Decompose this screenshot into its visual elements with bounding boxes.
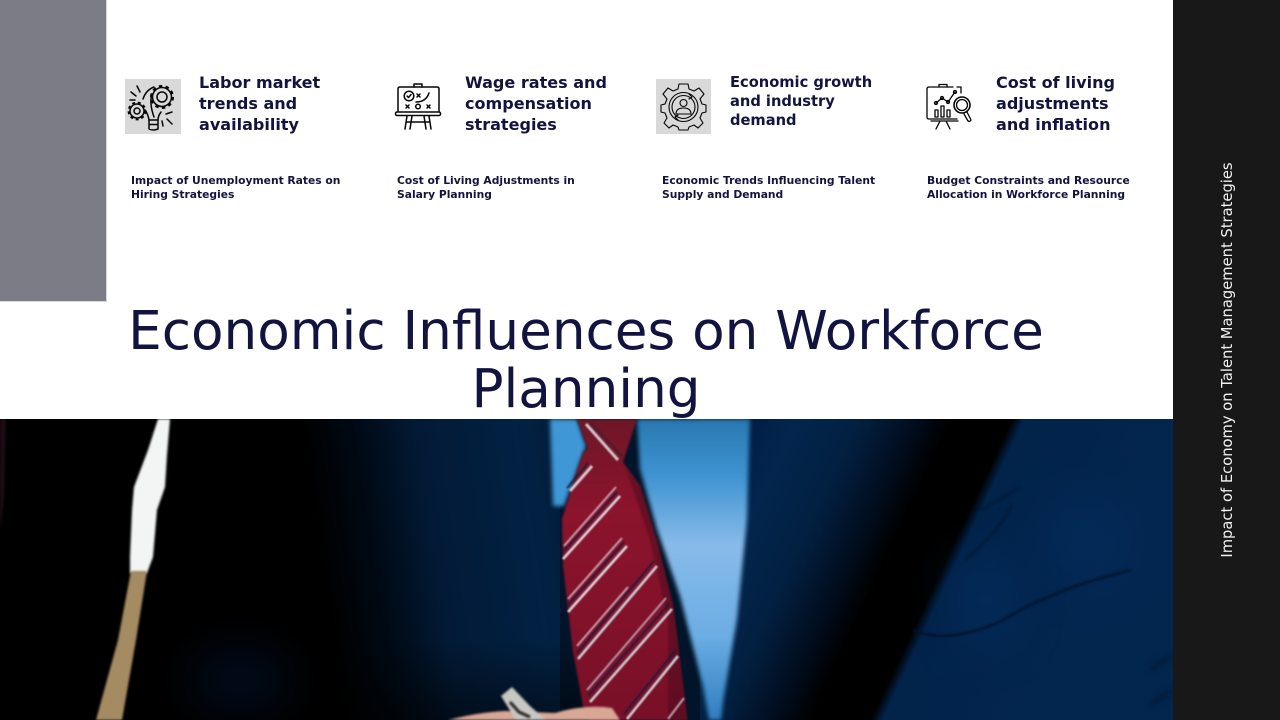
title: Planning	[471, 358, 701, 420]
tan strip	[96, 571, 147, 720]
heading	[465, 73, 607, 134]
suit left side	[0, 419, 562, 720]
icon: presentation chart with magnifier	[926, 84, 972, 130]
description	[927, 174, 1130, 201]
panel: wage rates	[394, 73, 607, 201]
description: Cost of Living Adjustments in	[397, 174, 575, 187]
panel: cost of living	[926, 73, 1130, 201]
decorative grey block	[0, 0, 107, 302]
panel: labor market	[125, 73, 340, 201]
description: Economic Trends Influencing Talent	[662, 174, 875, 187]
description: Allocation in Workforce Planning	[927, 188, 1125, 201]
heading: strategies	[465, 115, 557, 134]
panel: economic growth	[656, 74, 875, 201]
heading: compensation	[465, 94, 592, 113]
heading: Labor market	[199, 73, 320, 92]
suit highlights and folds	[0, 419, 1172, 710]
icon: light bulb and gears	[125, 79, 181, 134]
right sidebar	[1173, 0, 1280, 720]
description: Hiring Strategies	[131, 188, 234, 201]
icon: gear with person	[656, 79, 711, 134]
description: Salary Planning	[397, 188, 492, 201]
description: Supply and Demand	[662, 188, 783, 201]
necktie	[562, 419, 687, 720]
heading: Wage rates and	[465, 73, 607, 92]
heading: and industry	[730, 93, 835, 110]
heading: demand	[730, 112, 797, 129]
description	[131, 174, 340, 201]
heading: trends and	[199, 94, 297, 113]
heading: adjustments	[996, 94, 1109, 113]
photo: businessman in navy suit and red tie	[0, 419, 1173, 720]
description: Budget Constraints and Resource	[927, 174, 1130, 187]
heading	[199, 73, 320, 134]
heading: availability	[199, 115, 299, 134]
suit behind tie	[560, 419, 702, 720]
heading	[996, 73, 1115, 134]
description	[397, 174, 575, 201]
title: Economic Influences on Workforce	[128, 300, 1044, 362]
heading: and inflation	[996, 115, 1110, 134]
white shirt cuff	[130, 419, 170, 573]
suit bottom shade	[300, 640, 600, 720]
heading	[730, 74, 872, 129]
right shirt	[637, 419, 750, 720]
heading: Economic growth	[730, 74, 872, 91]
heading: Cost of living	[996, 73, 1115, 92]
description	[662, 174, 875, 201]
left shirt wedge	[550, 419, 586, 506]
title	[128, 300, 1044, 420]
description: Impact of Unemployment Rates on	[131, 174, 340, 187]
vertical sidebar title: Impact of Economy on Talent Management Strategies	[1218, 162, 1236, 558]
hand and pen	[448, 687, 620, 720]
suit right side	[700, 419, 1173, 720]
icon: strategy board	[394, 83, 442, 130]
